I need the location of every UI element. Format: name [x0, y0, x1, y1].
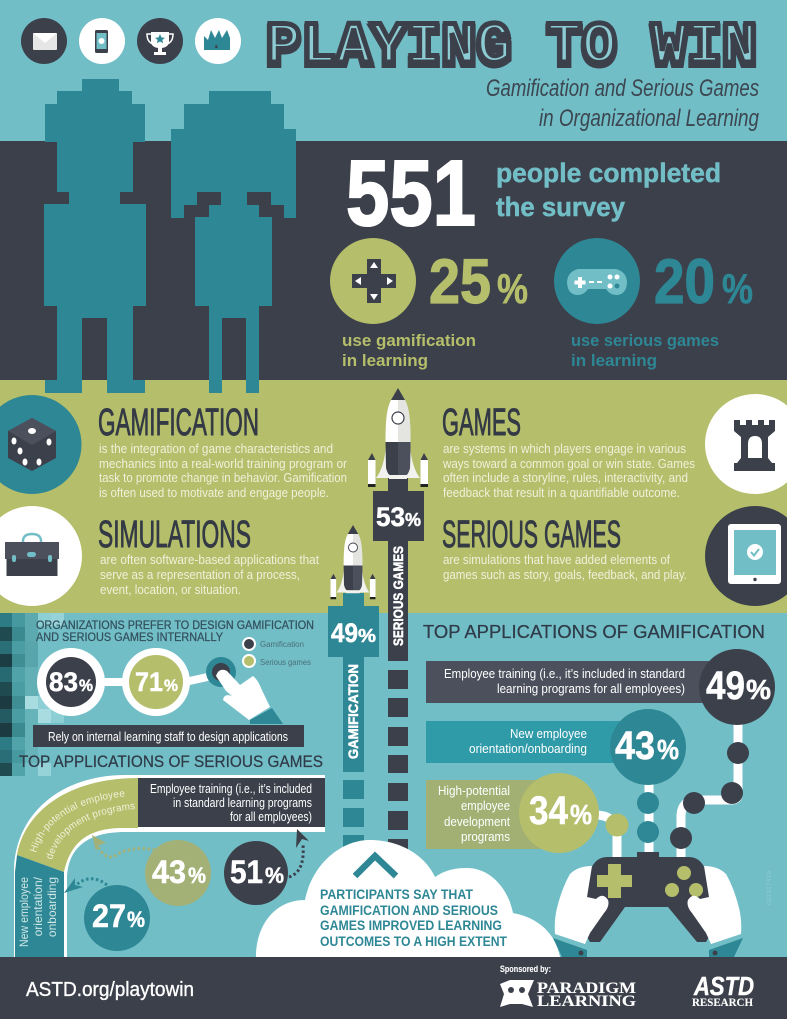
stat: 25% use gamification: [330, 238, 528, 370]
bar: new employee 43%: [426, 721, 626, 763]
stat: 25% use gamification: 25: [429, 247, 491, 317]
chart: serious games percentages: 43: [152, 854, 186, 890]
footer: url: ASTD.org/playtowin: [26, 979, 194, 1001]
footer: astd research logo: RESEARCH: [692, 995, 754, 1009]
chart: internal design percentages: %: [79, 676, 93, 695]
icon: tablet: [705, 506, 787, 606]
definition: gamification: GAMIFICATION: [98, 402, 259, 444]
chart: serious games percentages: %: [188, 863, 206, 888]
legend: Serious games: [260, 657, 311, 667]
circle: 49%: [699, 649, 775, 725]
center bars: gamification and serious games rockets: 53: [376, 502, 405, 532]
serious games track: for all employees): [230, 810, 312, 824]
footer: astd research logo: [692, 971, 754, 1009]
definition: gamification: is the integration of game characteristics and: [99, 442, 333, 456]
stat: 20% use serious games: [554, 238, 753, 370]
bar: employee training 49%: learning programs for all employees): [497, 682, 685, 696]
definition: gamification: is often used to motivate and engage people.: [99, 486, 329, 500]
icon: game controller with hands: [553, 852, 743, 957]
definition: gamification: task to promote change in behavior. Gamification: [99, 471, 347, 485]
cloud callout: [256, 840, 560, 957]
bar: high-potential 34%: [426, 780, 551, 849]
definition: serious games: [442, 514, 687, 582]
icon: gamification rocket: [330, 525, 376, 599]
arrow: 51% to employee training: [289, 829, 309, 877]
serious games track: High-potential employee: [30, 791, 124, 852]
panel: design internally heading: ORGANIZATIONS PREFER TO DESIGN GAMIFICATION: [36, 620, 314, 632]
serious games track: onboarding: [45, 877, 59, 937]
definition: games: are systems in which players engage in various: [443, 442, 686, 456]
chart: internal design percentages: 83: [49, 667, 78, 697]
circle: 43%: [610, 709, 686, 785]
cloud callout: GAMIFICATION AND SERIOUS: [320, 903, 498, 918]
stat: 25% use gamification: %: [497, 265, 528, 312]
bar: high-potential 34%: development: [444, 815, 510, 829]
title: PLAYING TO WIN: [266, 18, 757, 83]
serious games track: development programs: [46, 804, 135, 859]
center bars: gamification and serious games rockets: 49: [331, 618, 358, 648]
stat: 551 people completed the survey: 551: [346, 141, 476, 245]
bar: employee training 49%: [426, 661, 716, 703]
definition: simulations: [98, 514, 319, 597]
cloud callout: PARTICIPANTS SAY THAT: [320, 887, 474, 902]
definition: serious games: are simulations that have added elements of: [443, 553, 670, 567]
icon: trophy: [137, 18, 183, 64]
bar: high-potential 34%: employee: [461, 799, 510, 813]
circle: 43%: %: [657, 734, 679, 765]
stat: 20% use serious games: %: [722, 265, 753, 312]
center bars: gamification and serious games rockets: GAMIFICATION: [345, 664, 361, 759]
serious games track: [14, 775, 325, 957]
cloud callout: OUTCOMES TO A HIGH EXTENT: [320, 934, 508, 949]
definition: serious games: games such as story, goals, feedback, and play.: [443, 568, 687, 582]
stat: 551 people completed the survey: the survey: [496, 192, 625, 222]
center bars: gamification and serious games rockets: %: [405, 510, 421, 530]
panel: design internally heading: AND SERIOUS GAMES INTERNALLY: [36, 632, 223, 644]
connector dots: [606, 742, 749, 849]
icon: d-pad: [352, 259, 396, 303]
definition: gamification: [98, 402, 347, 500]
serious games track: in standard learning programs: [173, 796, 312, 810]
footer: astd research logo: ASTD: [693, 971, 754, 1001]
stat: 551 people completed the survey: people completed: [496, 158, 721, 188]
bar: high-potential 34%: programs: [461, 830, 510, 844]
definition: games: GAMES: [442, 402, 521, 444]
icon: briefcase: [0, 506, 82, 606]
subtitle: [486, 75, 760, 132]
stat: 551 people completed the survey: [346, 141, 721, 245]
title: PLAYING TO WIN: [266, 15, 757, 80]
definition: gamification: mechanics into a real-world training program or: [99, 457, 347, 471]
center bars: gamification and serious games rockets: SERIOUS GAMES: [390, 546, 406, 646]
definition: serious games: SERIOUS GAMES: [442, 514, 621, 556]
stat: 20% use serious games: 20: [654, 247, 715, 317]
definition: games: often include a storyline, rules, interactivity, and: [443, 471, 688, 485]
legend: [242, 637, 311, 668]
circle: 34%: [519, 773, 599, 853]
chart: serious games percentages: %: [127, 907, 145, 932]
callout: internal staff: Rely on internal learning staff to design applications: [48, 730, 288, 744]
callout: internal staff: [33, 725, 304, 747]
arrow: 43% to high-potential: [92, 835, 155, 857]
circle: 49%: %: [746, 674, 771, 705]
serious games track: orientation/: [31, 876, 45, 936]
icon: rook: [705, 394, 787, 494]
chart: internal design percentages: [37, 648, 236, 716]
definition: games: ways toward a common goal or win state. Games: [442, 457, 695, 471]
bar: new employee 43%: orientation/onboarding: [469, 742, 587, 756]
definition: games: feedback that result in a quantifiable outcome.: [443, 486, 680, 500]
stat: 25% use gamification: use gamification: [342, 331, 476, 350]
icon: serious games rocket: [368, 388, 428, 487]
serious games track: Employee training (i.e., it’s included: [150, 782, 312, 796]
pixel figure: man: [44, 79, 146, 393]
bar: new employee 43%: New employee: [510, 727, 587, 741]
circle: 49%: 49: [706, 664, 745, 708]
definition: simulations: are often software-based applications that: [100, 553, 319, 567]
icon: phone: [79, 18, 125, 64]
circle: 34%: %: [570, 799, 592, 830]
definition: games: [442, 402, 695, 500]
definition: simulations: SIMULATIONS: [98, 514, 251, 556]
icon: crown: [195, 18, 241, 64]
stat: 20% use serious games: in learning: [571, 351, 657, 370]
serious games track: New employee: [17, 877, 31, 947]
connector paths to controller: [595, 720, 738, 860]
chart: internal design percentages: %: [164, 676, 178, 695]
chart: serious games percentages: 51: [230, 854, 263, 890]
bar: high-potential 34%: High-potential: [438, 784, 510, 798]
arrow: 27% to new employee: [64, 878, 107, 893]
circle: 43%: 43: [615, 724, 655, 768]
footer: sponsor paradigm learning: [500, 964, 637, 1010]
bar: employee training 49%: Employee training (i.e., it’s included in standard: [444, 667, 685, 681]
center bars: gamification and serious games rockets: %: [358, 626, 376, 646]
stat: 25% use gamification: in learning: [342, 351, 428, 370]
definition: simulations: serve as a representation of a process,: [100, 568, 300, 582]
cloud callout: GAMES IMPROVED LEARNING: [320, 918, 502, 933]
chart: serious games percentages: [84, 840, 288, 951]
footer: sponsor paradigm learning: Sponsored by:: [500, 964, 551, 974]
decorative pixel column: [0, 613, 64, 776]
circle: 34%: 34: [529, 789, 569, 833]
definition: simulations: event, location, or situation.: [100, 583, 241, 597]
legend: Gamification: [260, 639, 304, 649]
chart: internal design percentages: 71: [135, 667, 163, 697]
footer: sponsor paradigm learning: LEARNING: [537, 993, 637, 1010]
footer: sponsor paradigm learning: PARADIGM: [537, 980, 636, 997]
icon: envelope: [21, 18, 67, 64]
icon: pointing hand: [216, 670, 283, 724]
icon: dice: [0, 395, 82, 494]
panel: design internally heading: [36, 620, 314, 644]
stat: 20% use serious games: use serious games: [571, 331, 719, 350]
image id: 021917419: [767, 870, 773, 905]
center bars: gamification and serious games rockets: [328, 475, 424, 858]
pixel figure: woman: [171, 91, 296, 393]
heading: top applications of gamification: TOP APPLICATIONS OF GAMIFICATION: [423, 621, 765, 642]
chart: serious games percentages: %: [265, 863, 284, 888]
icon: gamepad: [567, 269, 627, 295]
heading: top applications of serious games: TOP APPLICATIONS OF SERIOUS GAMES: [19, 753, 323, 771]
chart: serious games percentages: 27: [92, 898, 126, 934]
